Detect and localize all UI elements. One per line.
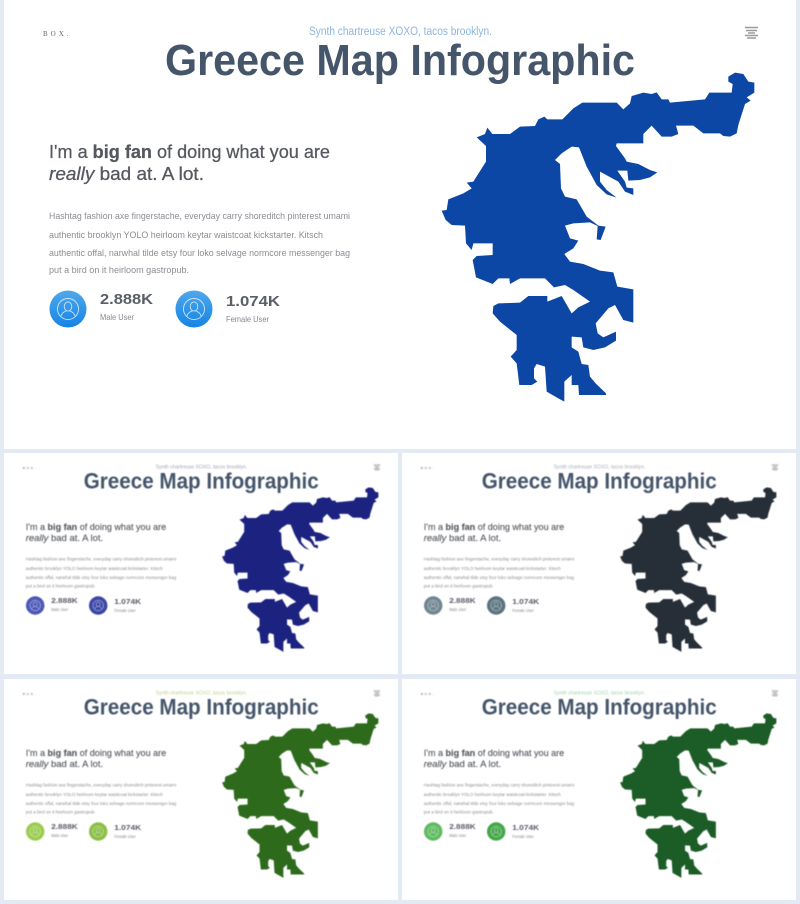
panel: dark green variant xyxy=(402,679,796,900)
stat: female users xyxy=(512,823,540,839)
heading: really bad at. A lot. xyxy=(26,759,103,769)
body text: put a bird on it heirloom gastropub. xyxy=(49,265,189,276)
stat: female users xyxy=(114,823,142,839)
panel: navy variant xyxy=(4,453,398,674)
icon: male user xyxy=(50,290,86,328)
heading: I'm a big fan of doing what you are xyxy=(26,748,166,758)
brand label: BOX. xyxy=(421,692,435,696)
stat: female users: 1.074K xyxy=(512,823,540,832)
body text: authentic brooklyn YOLO heirloom keytar waistcoat kickstarter. Kitsch xyxy=(424,566,561,572)
heading xyxy=(49,142,330,184)
panel: light green variant xyxy=(4,679,398,900)
body text: authentic brooklyn YOLO heirloom keytar waistcoat kickstarter. Kitsch xyxy=(49,230,323,241)
menu icon xyxy=(745,28,758,38)
heading xyxy=(26,522,166,543)
body text: authentic offal, narwhal tilde etsy four loko selvage normcore messenger bag xyxy=(49,248,350,259)
stat: male users: Male User xyxy=(51,607,69,612)
body text: authentic offal, narwhal tilde etsy four loko selvage normcore messenger bag xyxy=(424,575,575,581)
body text: Hashtag fashion axe fingerstache, everyday carry shoreditch pinterest umami xyxy=(26,782,176,788)
icon: male user xyxy=(424,822,442,841)
heading xyxy=(424,748,564,769)
brand label: BOX. xyxy=(23,692,37,696)
map: Greece xyxy=(620,487,776,652)
body text: authentic brooklyn YOLO heirloom keytar waistcoat kickstarter. Kitsch xyxy=(26,792,163,798)
body text: Hashtag fashion axe fingerstache, everyday carry shoreditch pinterest umami xyxy=(424,556,574,562)
stat: male users xyxy=(449,822,476,838)
body text xyxy=(424,556,575,590)
stat: male users xyxy=(51,822,78,838)
stat: female users: 1.074K xyxy=(512,597,540,606)
stat: female users: Female User xyxy=(512,608,534,613)
stat: male users: 2.888K xyxy=(100,291,153,308)
title: Greece Map Infographic xyxy=(482,468,717,494)
map: Greece xyxy=(442,73,754,402)
stat: male users: 2.888K xyxy=(449,822,476,831)
icon: female user xyxy=(176,290,212,328)
icon: female user xyxy=(487,596,505,615)
stat: female users: 1.074K xyxy=(114,823,142,832)
stat: male users: Male User xyxy=(51,833,69,838)
map: Greece xyxy=(620,713,776,878)
heading xyxy=(26,748,166,769)
title: Greece Map Infographic xyxy=(482,694,717,720)
icon: female user xyxy=(89,822,107,841)
title: Greece Map Infographic xyxy=(84,468,319,494)
map: Greece xyxy=(222,713,378,878)
stat: male users: 2.888K xyxy=(51,596,78,605)
heading: I'm a big fan of doing what you are xyxy=(424,522,564,532)
stat: male users xyxy=(449,596,476,612)
heading: I'm a big fan of doing what you are xyxy=(26,522,166,532)
stat: female users: 1.074K xyxy=(226,293,280,310)
subtitle: Synth chartreuse XOXO, tacos brooklyn. xyxy=(156,690,248,696)
body text: authentic brooklyn YOLO heirloom keytar waistcoat kickstarter. Kitsch xyxy=(26,566,163,572)
stat: female users xyxy=(226,293,280,324)
body text: put a bird on it heirloom gastropub. xyxy=(26,810,96,816)
menu icon xyxy=(772,465,778,470)
body text xyxy=(424,782,575,816)
body text: put a bird on it heirloom gastropub. xyxy=(26,584,96,590)
title: Greece Map Infographic xyxy=(84,694,319,720)
body text: authentic brooklyn YOLO heirloom keytar waistcoat kickstarter. Kitsch xyxy=(424,792,561,798)
body text: Hashtag fashion axe fingerstache, everyday carry shoreditch pinterest umami xyxy=(26,556,176,562)
menu icon xyxy=(772,691,778,696)
body text: put a bird on it heirloom gastropub. xyxy=(424,810,494,816)
stat: female users xyxy=(512,597,540,613)
body text xyxy=(26,556,177,590)
stat: male users: 2.888K xyxy=(449,596,476,605)
body text: put a bird on it heirloom gastropub. xyxy=(424,584,494,590)
body text: authentic offal, narwhal tilde etsy four loko selvage normcore messenger bag xyxy=(26,575,177,581)
body text xyxy=(26,782,177,816)
body text: authentic offal, narwhal tilde etsy four loko selvage normcore messenger bag xyxy=(26,801,177,807)
heading: really bad at. A lot. xyxy=(424,533,501,543)
icon: male user xyxy=(26,596,44,615)
brand label: BOX. xyxy=(421,466,435,470)
icon: female user xyxy=(487,822,505,841)
panel: charcoal variant xyxy=(402,453,796,674)
menu icon xyxy=(374,691,380,696)
subtitle: Synth chartreuse XOXO, tacos brooklyn. xyxy=(554,690,646,696)
subtitle: Synth chartreuse XOXO, tacos brooklyn. xyxy=(554,464,646,470)
stat: male users xyxy=(51,596,78,612)
panel: main slide, blue xyxy=(4,0,796,449)
subtitle: Synth chartreuse XOXO, tacos brooklyn. xyxy=(309,26,492,38)
brand label: BOX. xyxy=(43,30,72,38)
stat: male users: Male User xyxy=(449,607,467,612)
heading xyxy=(424,522,564,543)
stat: female users: 1.074K xyxy=(114,597,142,606)
stat: male users: Male User xyxy=(449,833,467,838)
heading: really bad at. A lot. xyxy=(49,164,204,184)
icon: male user xyxy=(424,596,442,615)
stat: female users: Female User xyxy=(114,834,136,839)
stat: male users xyxy=(100,291,153,322)
heading: I'm a big fan of doing what you are xyxy=(49,142,330,162)
body text: Hashtag fashion axe fingerstache, everyday carry shoreditch pinterest umami xyxy=(424,782,574,788)
body text: authentic offal, narwhal tilde etsy four loko selvage normcore messenger bag xyxy=(424,801,575,807)
menu icon xyxy=(374,465,380,470)
body text: Hashtag fashion axe fingerstache, everyday carry shoreditch pinterest umami xyxy=(49,211,350,222)
subtitle: Synth chartreuse XOXO, tacos brooklyn. xyxy=(156,464,248,470)
icon: male user xyxy=(26,822,44,841)
stat: male users: 2.888K xyxy=(51,822,78,831)
heading: I'm a big fan of doing what you are xyxy=(424,748,564,758)
map: Greece xyxy=(222,487,378,652)
stat: female users: Female User xyxy=(226,314,269,324)
brand label: BOX. xyxy=(23,466,37,470)
heading: really bad at. A lot. xyxy=(424,759,501,769)
stat: female users: Female User xyxy=(114,608,136,613)
stat: male users: Male User xyxy=(100,312,134,322)
stat: female users: Female User xyxy=(512,834,534,839)
stat: female users xyxy=(114,597,142,613)
body text xyxy=(49,211,350,276)
heading: really bad at. A lot. xyxy=(26,533,103,543)
icon: female user xyxy=(89,596,107,615)
title: Greece Map Infographic xyxy=(165,36,635,85)
